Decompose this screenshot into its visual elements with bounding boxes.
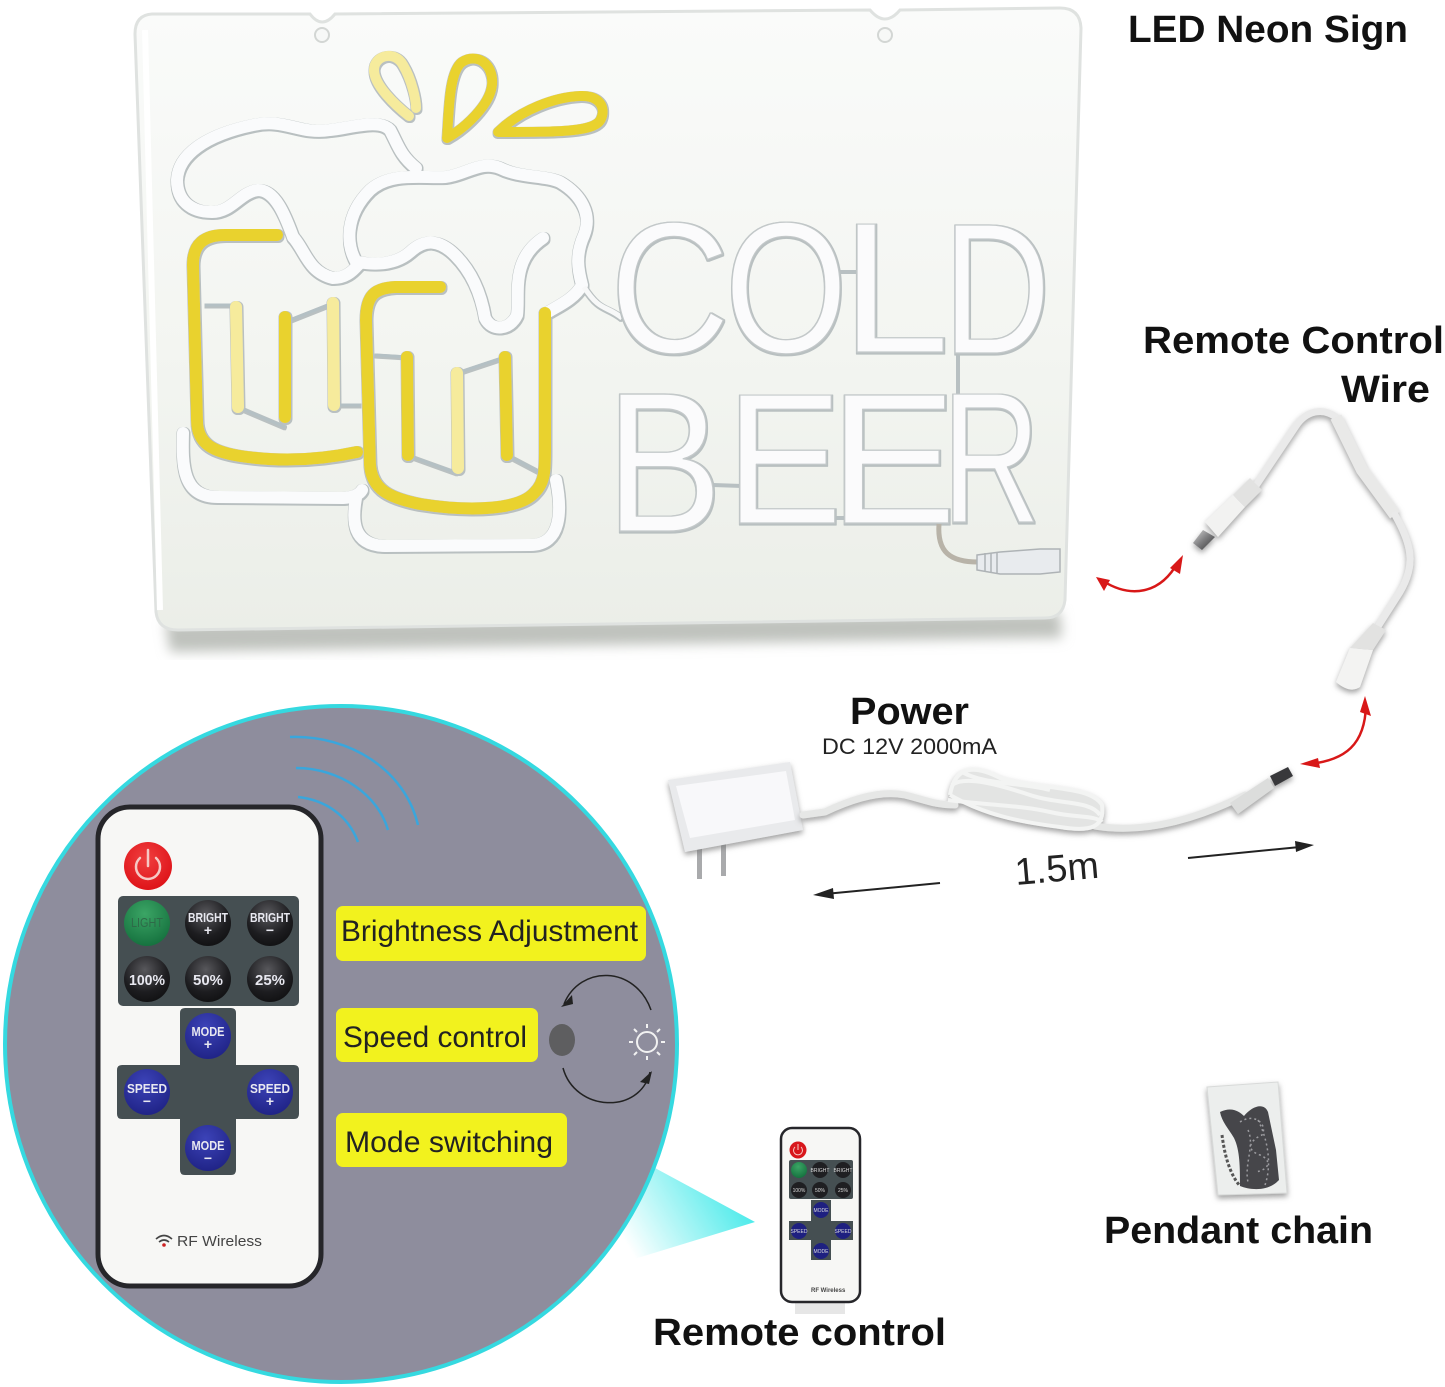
brightness button block: LIGHT — [131, 915, 163, 930]
mode and speed button cross: SPEED — [127, 1081, 167, 1096]
mode and speed button cross: + — [266, 1093, 274, 1109]
small remote control: BRIGHT — [811, 1168, 829, 1174]
panel: LED neon sign — [135, 8, 1081, 652]
red arrow: sign to wire — [1096, 555, 1183, 591]
small remote control: SPEED — [835, 1229, 852, 1235]
brightness button block: BRIGHT — [250, 910, 290, 925]
neon: COLD BEER lettering — [606, 184, 1050, 573]
mode and speed button cross: MODE — [192, 1138, 225, 1153]
neon: COLD BEER lettering: C — [610, 185, 730, 392]
arrow: length right — [1188, 841, 1314, 858]
mode and speed button cross: MODE — [192, 1024, 225, 1039]
label: Speed control: Speed control — [343, 1021, 527, 1054]
arrow: length left — [813, 883, 940, 899]
brightness button block: 100% — [129, 972, 165, 989]
small remote control: MODE — [814, 1249, 829, 1255]
heading: Remote Control Wire: Remote Control — [1143, 320, 1444, 362]
icon: sun — [629, 1024, 665, 1060]
small remote control — [781, 1128, 860, 1314]
heading: Remote Control Wire — [1143, 320, 1444, 411]
mode and speed button cross: + — [204, 1036, 212, 1052]
neon: COLD BEER lettering: E — [726, 356, 842, 563]
heading: Pendant chain: Pendant chain — [1104, 1210, 1373, 1252]
cyan zoom pointer — [605, 1168, 755, 1268]
label: Brightness Adjustment — [336, 906, 646, 961]
small remote control: RF Wireless — [811, 1288, 846, 1294]
panel: remote control detail circle — [5, 706, 677, 1382]
cable length label: 1.5m — [1013, 845, 1100, 894]
icon and label: RF Wireless: RF Wireless — [177, 1233, 262, 1250]
heading: Remote Control Wire: Wire — [1341, 369, 1430, 411]
brightness button block: + — [204, 922, 212, 938]
heading: LED Neon Sign: LED Neon Sign — [1128, 9, 1408, 51]
label: Mode switching: Mode switching — [345, 1126, 553, 1159]
neon sign DC connector — [939, 524, 1060, 574]
brightness button block: 50% — [193, 972, 223, 989]
neon: beer mugs — [177, 56, 622, 546]
remote control extension wire — [1193, 411, 1410, 690]
large remote — [98, 807, 321, 1286]
neon: COLD BEER lettering: E — [829, 356, 957, 563]
mode and speed button cross — [117, 1008, 299, 1175]
pendant chain bag — [1207, 1082, 1287, 1195]
power adapter with cable — [668, 762, 1293, 879]
small remote control: SPEED — [791, 1229, 808, 1235]
mode and speed button cross: − — [204, 1150, 212, 1166]
neon wire links between letters — [713, 272, 958, 518]
small remote control: 100% — [793, 1188, 806, 1194]
brightness button block — [118, 896, 299, 1006]
heading: Remote control: Remote control — [653, 1312, 946, 1354]
heading: Power: Power — [850, 691, 969, 733]
neon: COLD BEER lettering: D — [943, 185, 1050, 393]
mode and speed button cross: − — [143, 1093, 151, 1109]
red arrow: wire to power — [1300, 696, 1371, 768]
speed rotation diagram — [549, 975, 665, 1103]
mode and speed button cross: SPEED — [250, 1081, 290, 1096]
neon: COLD BEER lettering: B — [606, 350, 722, 573]
icon: power button — [124, 842, 172, 890]
power rating: DC 12V 2000mA — [822, 734, 997, 759]
label: Speed control — [336, 1008, 538, 1062]
brightness button block: 25% — [255, 972, 285, 989]
small remote control: BRIGHT — [834, 1168, 852, 1174]
brightness button block: BRIGHT — [188, 910, 228, 925]
neon: COLD BEER lettering: L — [841, 184, 950, 392]
label: Brightness Adjustment: Brightness Adjustment — [341, 915, 639, 948]
small remote control: 50% — [815, 1188, 826, 1194]
icon: wireless signal arcs — [290, 737, 418, 842]
label: Mode switching — [336, 1113, 567, 1167]
brightness button block: − — [266, 922, 274, 938]
small remote control: MODE — [814, 1208, 829, 1214]
small remote control: 25% — [838, 1188, 849, 1194]
acrylic backing board — [135, 8, 1081, 630]
neon: COLD BEER lettering: O — [724, 184, 847, 392]
neon: COLD BEER lettering: R — [942, 354, 1040, 562]
